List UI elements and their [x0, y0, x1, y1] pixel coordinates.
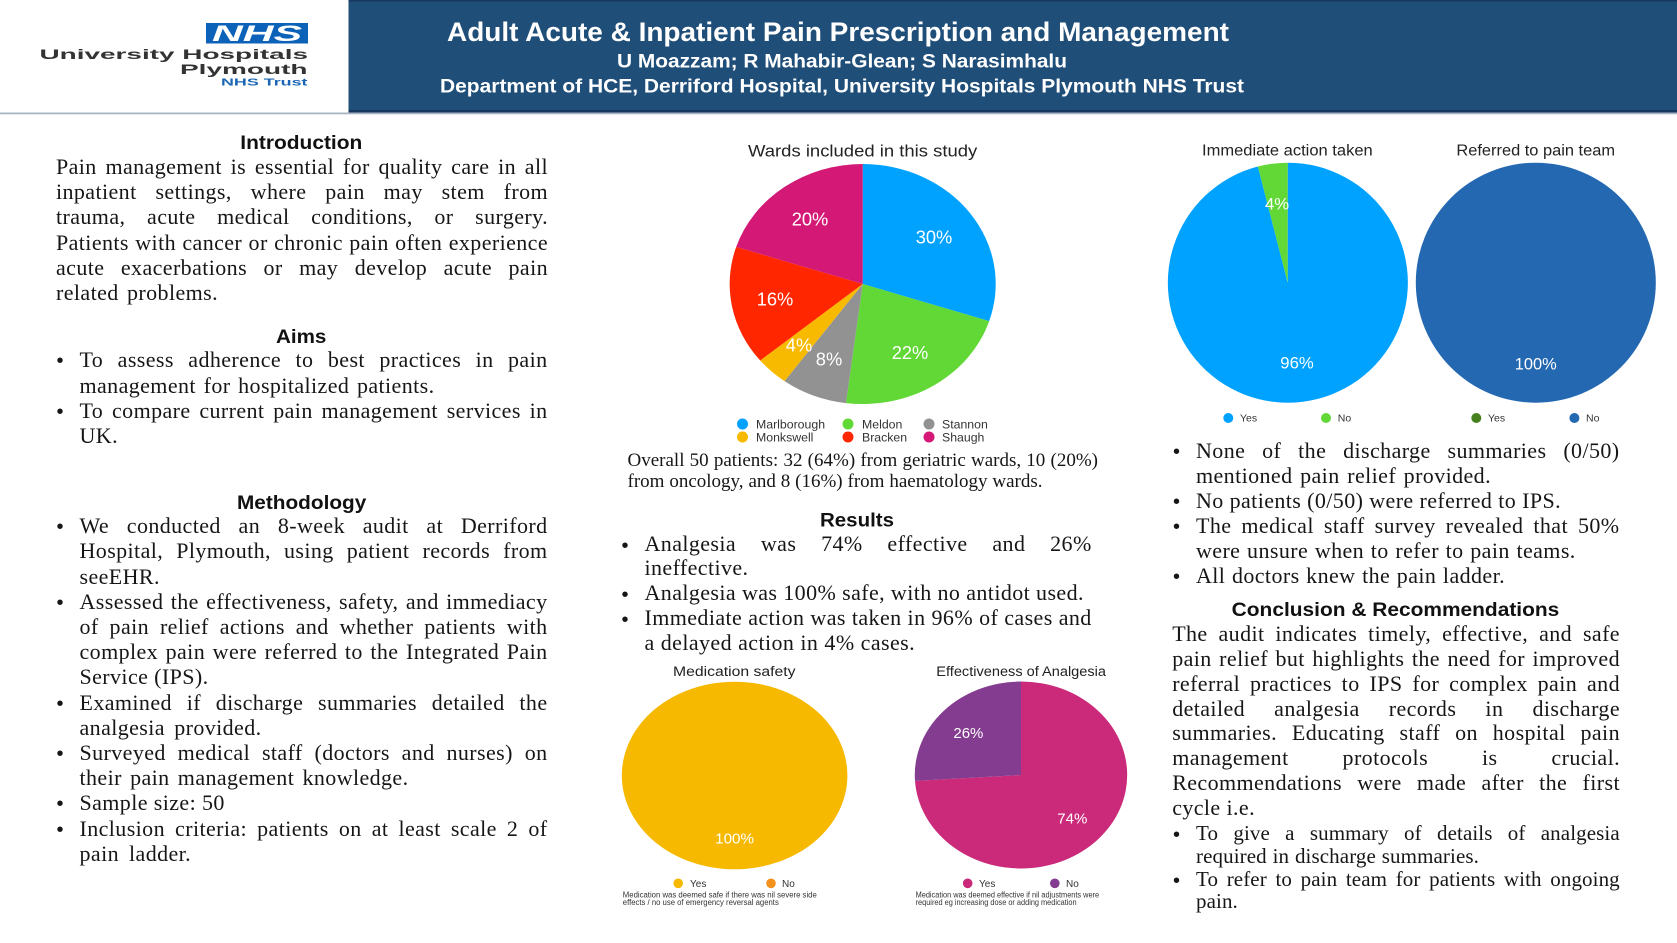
text block: patient overview: [628, 450, 1098, 492]
department: Department of HCE, Derriford Hospital, University Hospitals Plymouth NHS Trust: [440, 77, 1245, 98]
bullet list: findings: All doctors knew the pain ladder.: [1196, 563, 1505, 588]
pie chart: medication safety: Medication safety: [673, 664, 796, 679]
text block: conclusion: Recommendations were made after the first: [1172, 770, 1620, 795]
heading: Aims: Aims: [276, 326, 327, 348]
legend: wards: [737, 417, 988, 444]
bullet list: recommendations: [1173, 821, 1620, 913]
text: •: [1173, 870, 1180, 892]
pie chart: wards included: 22%: [892, 342, 928, 363]
bullet list: results: [622, 531, 1092, 655]
footnote: effectiveness: [916, 891, 1100, 907]
bullet list: methodology: Assessed the effectiveness, safety, and immediacy: [80, 589, 548, 614]
footnote: effectiveness: Medication was deemed effective if nil adjustments were: [916, 891, 1100, 900]
bullet list: results: Analgesia was 74% effective and 26%: [644, 531, 1092, 556]
text: •: [1173, 516, 1180, 538]
pie chart: immediate action taken: Immediate action taken: [1202, 142, 1373, 159]
text block: introduction: related problems.: [56, 280, 218, 305]
legend: wards: Shaugh: [942, 430, 985, 444]
text: •: [622, 535, 629, 557]
text block: introduction: Pain management is essential for quality care in all: [56, 154, 548, 179]
pie chart: referred to pain team: [1416, 142, 1656, 425]
legend: wards: Monkswell: [756, 430, 813, 444]
footnote: medication safety: [623, 891, 817, 907]
bullet list: methodology: of pain relief actions and whether patients with: [80, 614, 548, 639]
NHS trust logo: Plymouth: [180, 61, 308, 77]
legend: immediate action: Yes: [1240, 413, 1257, 425]
bullet list: methodology: Service (IPS).: [80, 664, 209, 689]
bullet list: results: Immediate action was taken in 96% of cases and: [644, 605, 1092, 630]
legend: immediate action: [1223, 413, 1351, 425]
NHS trust logo: University Hospitals: [40, 46, 308, 62]
bullet list: methodology: Sample size: 50: [80, 790, 225, 815]
text: •: [1173, 824, 1180, 846]
NHS trust logo: [40, 21, 309, 88]
pie chart: effectiveness of analgesia: 74%: [1057, 811, 1087, 828]
text: •: [56, 401, 64, 423]
heading: Conclusion and Recommendations: Conclusion & Recommendations: [1232, 599, 1559, 621]
text: •: [56, 743, 64, 765]
pie chart: wards included: 4%: [786, 334, 812, 356]
bullet list: methodology: Hospital, Plymouth, using patient records from: [80, 538, 548, 563]
text block: conclusion: pain relief but highlights the need for improved: [1172, 646, 1620, 671]
text block: introduction: [56, 154, 548, 305]
heading: Introduction: Introduction: [240, 132, 362, 154]
bullet list: aims: [56, 347, 548, 448]
text: •: [56, 819, 64, 841]
pie chart: immediate action taken: [1168, 142, 1408, 425]
legend: medication safety: [673, 878, 795, 890]
text block: conclusion: detailed analgesia records in discharge: [1172, 696, 1620, 721]
text: •: [56, 693, 64, 715]
legend: referred: No: [1586, 413, 1600, 425]
legend: wards: Stannon: [942, 417, 988, 431]
pie chart: immediate action taken: 4%: [1265, 194, 1289, 214]
bullet list: methodology: analgesia provided.: [80, 715, 262, 740]
bullet list: recommendations: required in discharge summaries.: [1196, 844, 1479, 868]
bullet list: findings: None of the discharge summaries (0/50): [1196, 438, 1620, 463]
text block: conclusion: management protocols is crucial.: [1172, 745, 1620, 770]
bullet list: findings: were unsure when to refer to pain teams.: [1196, 538, 1576, 563]
text: •: [56, 350, 64, 372]
pie chart: effectiveness of analgesia: Effectiveness of Analgesia: [936, 664, 1107, 679]
pie chart: referred to pain team: Referred to pain team: [1456, 142, 1615, 159]
bullet list: methodology: complex pain were referred to the Integrated Pain: [80, 639, 548, 664]
text: •: [56, 592, 64, 614]
text block: conclusion: The audit indicates timely, effective, and safe: [1172, 621, 1620, 646]
bullet list: findings: No patients (0/50) were referred to IPS.: [1196, 488, 1561, 513]
bullet list: aims: To compare current pain management services in: [80, 398, 548, 423]
bullet list: methodology: We conducted an 8-week audit at Derriford: [80, 513, 548, 538]
bullet list: methodology: Inclusion criteria: patients on at least scale 2 of: [80, 816, 548, 841]
legend: immediate action: No: [1338, 413, 1351, 425]
text block: introduction: inpatient settings, where pain may stem from: [56, 179, 548, 204]
bullet list: methodology: [56, 513, 548, 866]
footnote: medication safety: effects / no use of emergency reversal agents: [623, 898, 779, 907]
pie chart: effectiveness of analgesia: [915, 664, 1127, 907]
legend: referred: Yes: [1488, 413, 1505, 425]
legend: medication safety: Yes: [690, 879, 706, 890]
NHS trust logo: NHS: [212, 21, 303, 46]
pie chart: wards included: 30%: [916, 226, 952, 248]
text block: introduction: trauma, acute medical conditions, or surgery.: [56, 204, 548, 229]
text block: patient overview: from oncology, and 8 (16%) from haematology wards.: [628, 471, 1042, 492]
pie chart: effectiveness of analgesia: 26%: [953, 725, 983, 742]
NHS trust logo: NHS Trust: [221, 78, 309, 88]
legend: wards: Meldon: [862, 417, 902, 431]
text: •: [56, 793, 64, 815]
legend: wards: Marlborough: [756, 417, 825, 431]
heading: Methodology: Methodology: [237, 492, 366, 514]
text: •: [56, 516, 64, 538]
pie chart: medication safety: [622, 664, 847, 907]
pie chart: medication safety: 100%: [715, 830, 754, 848]
bullet list: aims: UK.: [80, 423, 118, 448]
bullet list: methodology: pain ladder.: [80, 841, 191, 866]
text block: introduction: acute exacerbations or may develop acute pain: [56, 255, 548, 280]
footnote: medication safety: Medication was deemed safe if there was nil severe side: [623, 891, 817, 900]
legend: wards: Bracken: [862, 430, 907, 444]
bullet list: findings: [1173, 438, 1620, 588]
pie chart: wards included: Wards included in this study: [748, 142, 978, 160]
legend: medication safety: No: [782, 879, 795, 890]
text block: conclusion: referral practices to IPS for complex pain and: [1172, 671, 1620, 696]
bullet list: methodology: their pain management knowledge.: [80, 765, 408, 790]
bullet list: recommendations: To give a summary of details of analgesia: [1196, 821, 1620, 845]
pie chart: wards included: 16%: [757, 288, 793, 310]
text block: introduction: Patients with cancer or chronic pain often experience: [56, 230, 548, 255]
pie chart: referred to pain team: 100%: [1515, 356, 1557, 374]
legend: effectiveness: [963, 878, 1079, 890]
text block: conclusion: cycle i.e.: [1172, 795, 1255, 820]
authors: U Moazzam; R Mahabir-Glean; S Narasimhalu: [617, 52, 1067, 72]
heading: Results: Results: [820, 510, 894, 532]
bullet list: results: Analgesia was 100% safe, with no antidot used.: [644, 580, 1084, 605]
pie chart: wards included: [730, 142, 996, 444]
bullet list: methodology: Examined if discharge summaries detailed the: [80, 690, 548, 715]
legend: referred: [1471, 413, 1600, 425]
bullet list: aims: To assess adherence to best practices in pain: [80, 347, 548, 372]
bullet list: methodology: Surveyed medical staff (doctors and nurses) on: [80, 740, 548, 765]
legend: effectiveness: No: [1066, 879, 1079, 890]
pie chart: wards included: 20%: [792, 208, 828, 230]
bullet list: aims: management for hospitalized patients.: [80, 373, 434, 398]
legend: effectiveness: Yes: [979, 879, 995, 890]
bullet list: findings: The medical staff survey revealed that 50%: [1196, 513, 1620, 538]
poster title: Adult Acute & Inpatient Pain Prescription and Management: [447, 17, 1229, 47]
bullet list: findings: mentioned pain relief provided.: [1196, 463, 1491, 488]
pie chart: immediate action taken: 96%: [1280, 354, 1314, 373]
text block: conclusion: summaries. Educating staff on hospital pain: [1172, 720, 1620, 745]
footnote: effectiveness: required eg increasing dose or adding medication: [916, 898, 1077, 907]
pie chart: wards included: 8%: [816, 348, 842, 370]
text: •: [1173, 566, 1180, 588]
text: •: [1173, 441, 1180, 463]
bullet list: results: ineffective.: [644, 555, 748, 580]
text block: patient overview: Overall 50 patients: 32 (64%) from geriatric wards, 10 (20%): [628, 450, 1098, 471]
text: •: [1173, 491, 1180, 513]
text: •: [622, 609, 629, 631]
text block: conclusion: [1172, 621, 1620, 820]
text: •: [622, 584, 629, 606]
header band: [0, 0, 1677, 114]
bullet list: recommendations: To refer to pain team for patients with ongoing: [1196, 867, 1620, 891]
bullet list: results: a delayed action in 4% cases.: [644, 630, 915, 655]
bullet list: methodology: seeEHR.: [80, 564, 160, 589]
bullet list: recommendations: pain.: [1196, 889, 1238, 913]
